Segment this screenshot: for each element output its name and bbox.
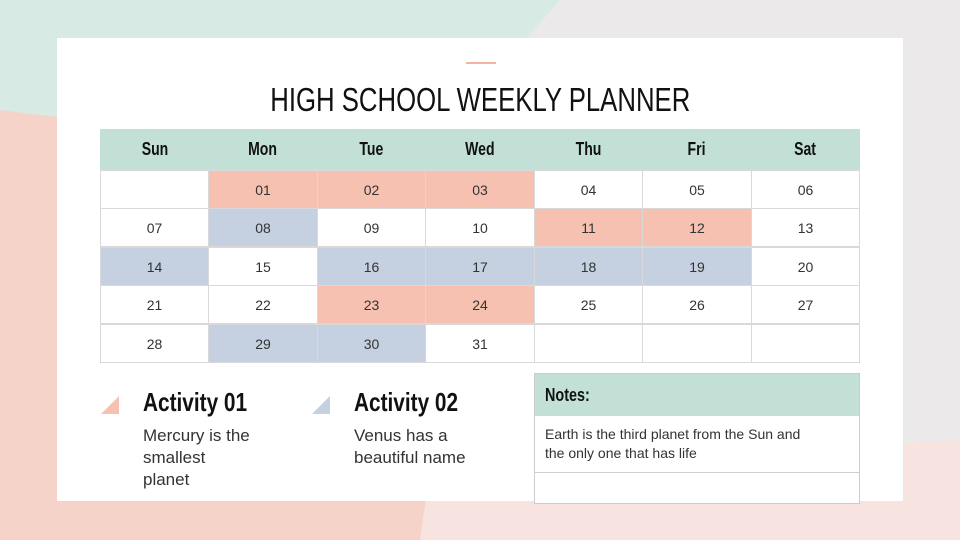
calendar: 15 [255,258,271,274]
icon: blue triangle [312,396,330,414]
row 2 [100,208,209,247]
title: HIGH SCHOOL WEEKLY PLANNER [270,81,690,118]
activity 01: smallest [143,448,205,467]
calendar: 18 [581,258,596,274]
notes box [534,373,860,504]
activity 01: planet [143,470,189,489]
activity 02 [354,387,466,467]
header row [100,129,860,170]
row 2: 07 [147,220,162,236]
calendar: 11 [581,220,596,236]
calendar: 04 [581,182,596,198]
activity 01 [143,387,250,489]
calendar: 27 [798,296,813,312]
calendar: 06 [798,182,813,198]
activity 01: Activity 01 [143,387,247,417]
accent dash [466,62,496,64]
row 5 [100,324,209,363]
calendar: Fri [688,139,705,159]
notes text [535,416,859,473]
calendar: 24 [472,296,488,312]
row 3: 14 [147,258,162,274]
calendar: 08 [255,220,271,236]
calendar: 30 [364,336,379,352]
calendar: 02 [364,182,379,198]
notes header [535,374,859,416]
calendar: 09 [364,220,379,236]
calendar: 22 [255,296,271,312]
calendar: 01 [255,182,271,198]
activity 02: beautiful name [354,448,466,467]
calendar: 13 [798,220,813,236]
card [57,38,903,501]
row 1 [100,170,209,209]
notes text: Earth is the third planet from the Sun and [545,426,800,442]
row 3 [100,247,209,286]
calendar: 03 [472,182,488,198]
calendar: 31 [472,336,488,352]
calendar: Tue [360,139,383,159]
notes text: the only one that has life [545,445,697,461]
calendar: 29 [255,336,271,352]
calendar: Sat [795,139,816,159]
row 4: 21 [147,296,162,312]
calendar: 23 [364,296,379,312]
row 4 [100,285,209,324]
calendar: 26 [689,296,705,312]
calendar: Sun [141,139,168,159]
calendar: 25 [581,296,596,312]
icon: pink triangle [101,396,119,414]
calendar: 05 [689,182,705,198]
notes header: Notes: [545,385,590,405]
calendar: 10 [472,220,488,236]
calendar [100,129,860,363]
calendar: 16 [364,258,379,274]
calendar: 20 [798,258,813,274]
calendar: Thu [576,139,601,159]
activity 01: Mercury is the [143,426,250,445]
calendar: Mon [248,139,277,159]
activity 02: Venus has a [354,426,448,445]
row 5: 28 [147,336,162,352]
calendar: 17 [472,258,488,274]
calendar: 12 [689,220,705,236]
calendar: Wed [465,139,494,159]
activity 02: Activity 02 [354,387,458,417]
calendar: 19 [689,258,705,274]
